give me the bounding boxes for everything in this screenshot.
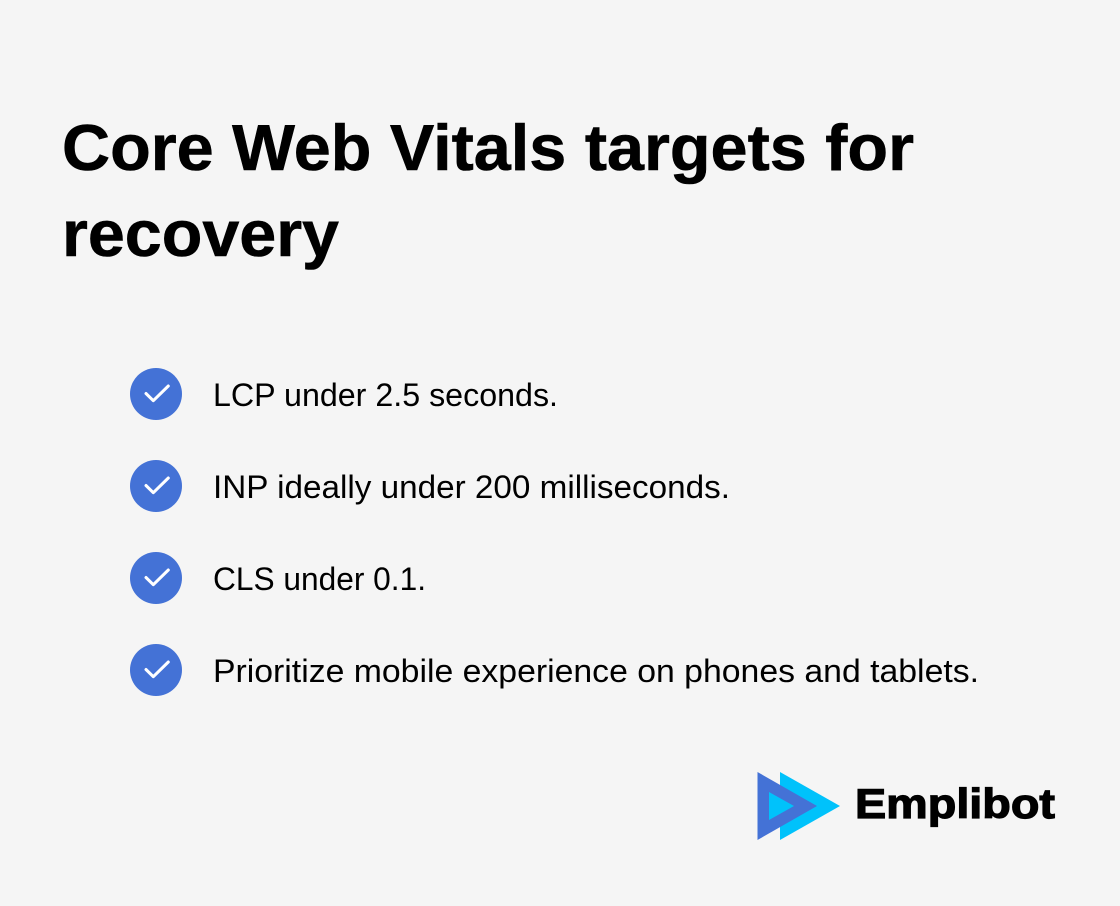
item: CLS: CLS under 0.1. [213, 561, 426, 597]
logo: Emplibot: Emplibot [855, 780, 1055, 827]
item: mobile: Prioritize mobile experience on phones and tablets. [213, 653, 979, 689]
title: Core Web Vitals targets for [62, 111, 914, 184]
item: mobile [130, 644, 979, 696]
item: INP [130, 460, 730, 512]
item: LCP: LCP under 2.5 seconds. [213, 377, 558, 413]
title [62, 111, 914, 270]
checklist [130, 368, 979, 696]
item: CLS [130, 552, 426, 604]
logo: Emplibot [758, 772, 1055, 840]
item: LCP [130, 368, 558, 420]
title: recovery [62, 197, 339, 270]
item: INP: INP ideally under 200 milliseconds. [213, 469, 730, 505]
